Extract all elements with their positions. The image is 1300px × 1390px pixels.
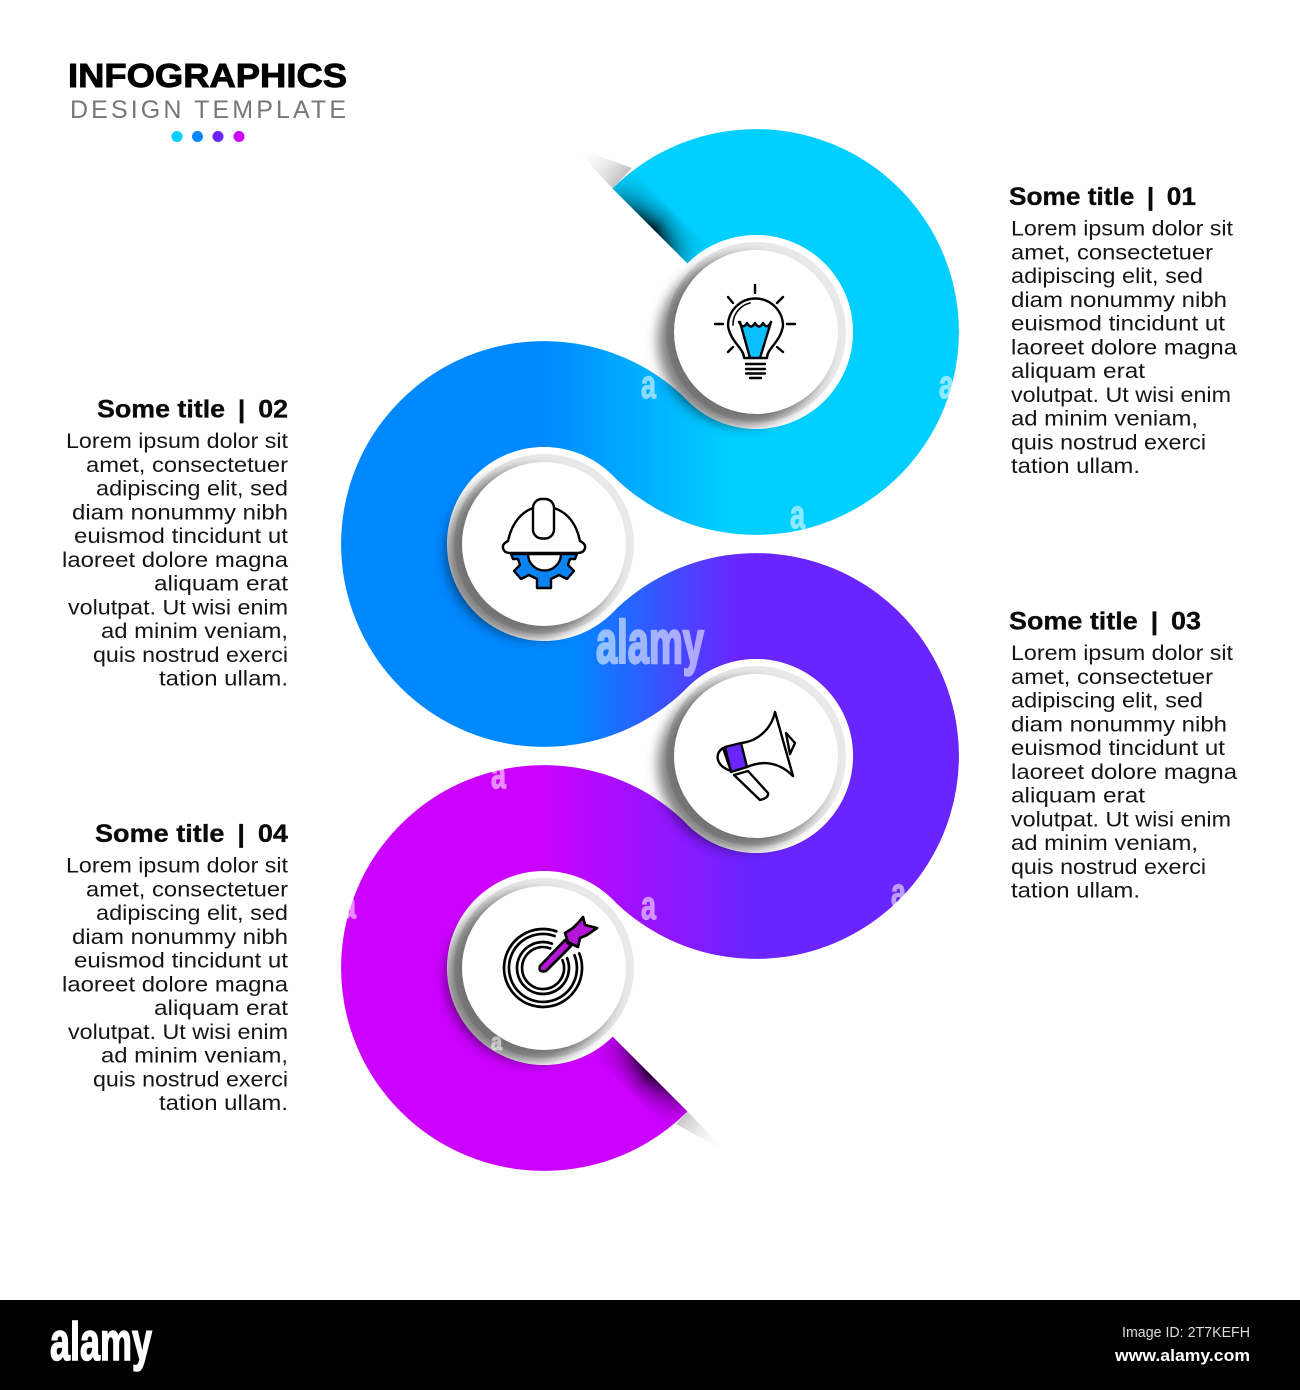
body: step 04: quis nostrud exerci [93, 1068, 288, 1091]
body: step 04: diam nonummy nibh [72, 926, 288, 949]
body: step 04: laoreet dolore magna [62, 973, 288, 996]
footer bar [0, 1300, 1300, 1390]
step 3 disc with megaphone icon [658, 659, 853, 853]
panel: step 02 text [62, 396, 288, 690]
title block [68, 57, 347, 142]
step 4 disc with target icon [446, 871, 641, 1065]
body: step 03: Lorem ipsum dolor sit [1011, 642, 1233, 665]
ribbon segment: cyan arc [650, 182, 906, 333]
icon: light bulb [715, 285, 795, 378]
watermarks on ribbon: a [790, 493, 806, 537]
body: step 02: euismod tincidunt ut [74, 525, 288, 548]
body: step 02: diam nonummy nibh [72, 501, 288, 524]
body: step 01: aliquam erat [1011, 360, 1145, 383]
body: step 03: volutpat. Ut wisi enim [1011, 808, 1231, 831]
body: step 02: laoreet dolore magna [62, 549, 288, 572]
icon: hard hat with gear [503, 499, 585, 588]
body: step 01: euismod tincidunt ut [1011, 312, 1225, 336]
body: step 02: tation ullam. [159, 668, 288, 690]
colour dots [172, 131, 244, 142]
footer url: www.alamy.com [1114, 1346, 1250, 1365]
fold shadow: top cut [612, 175, 700, 264]
body: step 03: tation ullam. [1011, 880, 1140, 902]
panel: step 04 text [62, 820, 288, 1115]
body: step 02 [62, 430, 288, 690]
watermarks on ribbon: a [341, 883, 357, 927]
subheading: design template: DESIGN TEMPLATE [70, 96, 346, 124]
body: step 03: ad minim veniam, [1011, 832, 1198, 855]
body: step 01: diam nonummy nibh [1011, 289, 1227, 312]
heading: step 03: Some title | 03 [1009, 608, 1201, 636]
step 2 disc with helmet icon [446, 447, 641, 641]
body: step 02: volutpat. Ut wisi enim [68, 596, 288, 619]
ribbon tail shadow: top [574, 147, 632, 188]
body: step 04: amet, consectetuer [86, 878, 288, 901]
body: step 03 [1011, 642, 1237, 902]
watermarks on ribbon: a [641, 363, 657, 407]
body: step 04: ad minim veniam, [101, 1044, 288, 1068]
body: step 03: diam nonummy nibh [1011, 713, 1227, 736]
icon: target with arrow [504, 917, 597, 1007]
body: step 03: aliquam erat [1011, 784, 1145, 808]
body: step 04: euismod tincidunt ut [74, 950, 288, 972]
body: step 01: adipiscing elit, sed [1011, 265, 1203, 288]
body: step 02: quis nostrud exerci [93, 644, 288, 667]
panel: step 03 text [1009, 608, 1237, 902]
body: step 01: quis nostrud exerci [1011, 431, 1206, 454]
panel: step 01 text [1009, 183, 1237, 478]
footer image id: Image ID: 2T7KEFH [1122, 1324, 1250, 1341]
heading: step 04: Some title | 04 [95, 820, 288, 848]
body: step 02: aliquam erat [154, 572, 288, 596]
body: step 02: amet, consectetuer [86, 454, 288, 477]
fold shadow: bottom cut [601, 1036, 688, 1126]
watermarks on ribbon [341, 363, 955, 928]
ribbon segment: blue to purple [394, 543, 906, 757]
body: step 04 [62, 854, 288, 1115]
ribbon segment: magenta arc [394, 967, 650, 1118]
body: step 03: adipiscing elit, sed [1011, 690, 1203, 712]
body: step 02: ad minim veniam, [101, 620, 288, 643]
ribbon tail shadow: bottom [676, 1112, 728, 1153]
heading: infographics: INFOGRAPHICS [68, 57, 347, 94]
body: step 03: laoreet dolore magna [1011, 761, 1237, 784]
body: step 01: amet, consectetuer [1011, 241, 1213, 264]
step 1 disc with bulb icon [658, 235, 853, 429]
body: step 04: tation ullam. [159, 1092, 288, 1115]
serpentine ribbon [394, 147, 906, 1153]
small watermark over disc 4: a [491, 1029, 503, 1056]
body: step 01 [1011, 218, 1237, 478]
body: step 01: volutpat. Ut wisi enim [1011, 384, 1231, 407]
body: step 04: adipiscing elit, sed [96, 902, 288, 925]
body: step 04: volutpat. Ut wisi enim [68, 1021, 288, 1044]
icon: megaphone [718, 712, 795, 800]
footer logo: alamy [50, 1312, 152, 1372]
body: step 02: Lorem ipsum dolor sit [66, 430, 288, 453]
body: step 03: quis nostrud exerci [1011, 856, 1206, 879]
ribbon segment: cyan to blue [394, 331, 906, 545]
watermarks on ribbon: a [641, 884, 657, 928]
watermarks on ribbon: a [891, 871, 907, 915]
body: step 03: amet, consectetuer [1011, 666, 1213, 689]
watermarks on ribbon: alamy [596, 609, 704, 676]
watermarks on ribbon: a [491, 753, 507, 797]
body: step 03: euismod tincidunt ut [1011, 737, 1225, 760]
body: step 02: adipiscing elit, sed [96, 478, 288, 500]
watermarks on ribbon: a [939, 363, 955, 407]
body: step 01: Lorem ipsum dolor sit [1011, 218, 1233, 240]
heading: step 01: Some title | 01 [1009, 183, 1196, 211]
ribbon segment: purple to magenta [394, 755, 906, 969]
body: step 01: laoreet dolore magna [1011, 336, 1237, 359]
body: step 04: Lorem ipsum dolor sit [66, 854, 288, 878]
heading: step 02: Some title | 02 [97, 396, 288, 424]
body: step 04: aliquam erat [154, 997, 288, 1020]
body: step 01: tation ullam. [1011, 455, 1140, 478]
body: step 01: ad minim veniam, [1011, 408, 1198, 430]
